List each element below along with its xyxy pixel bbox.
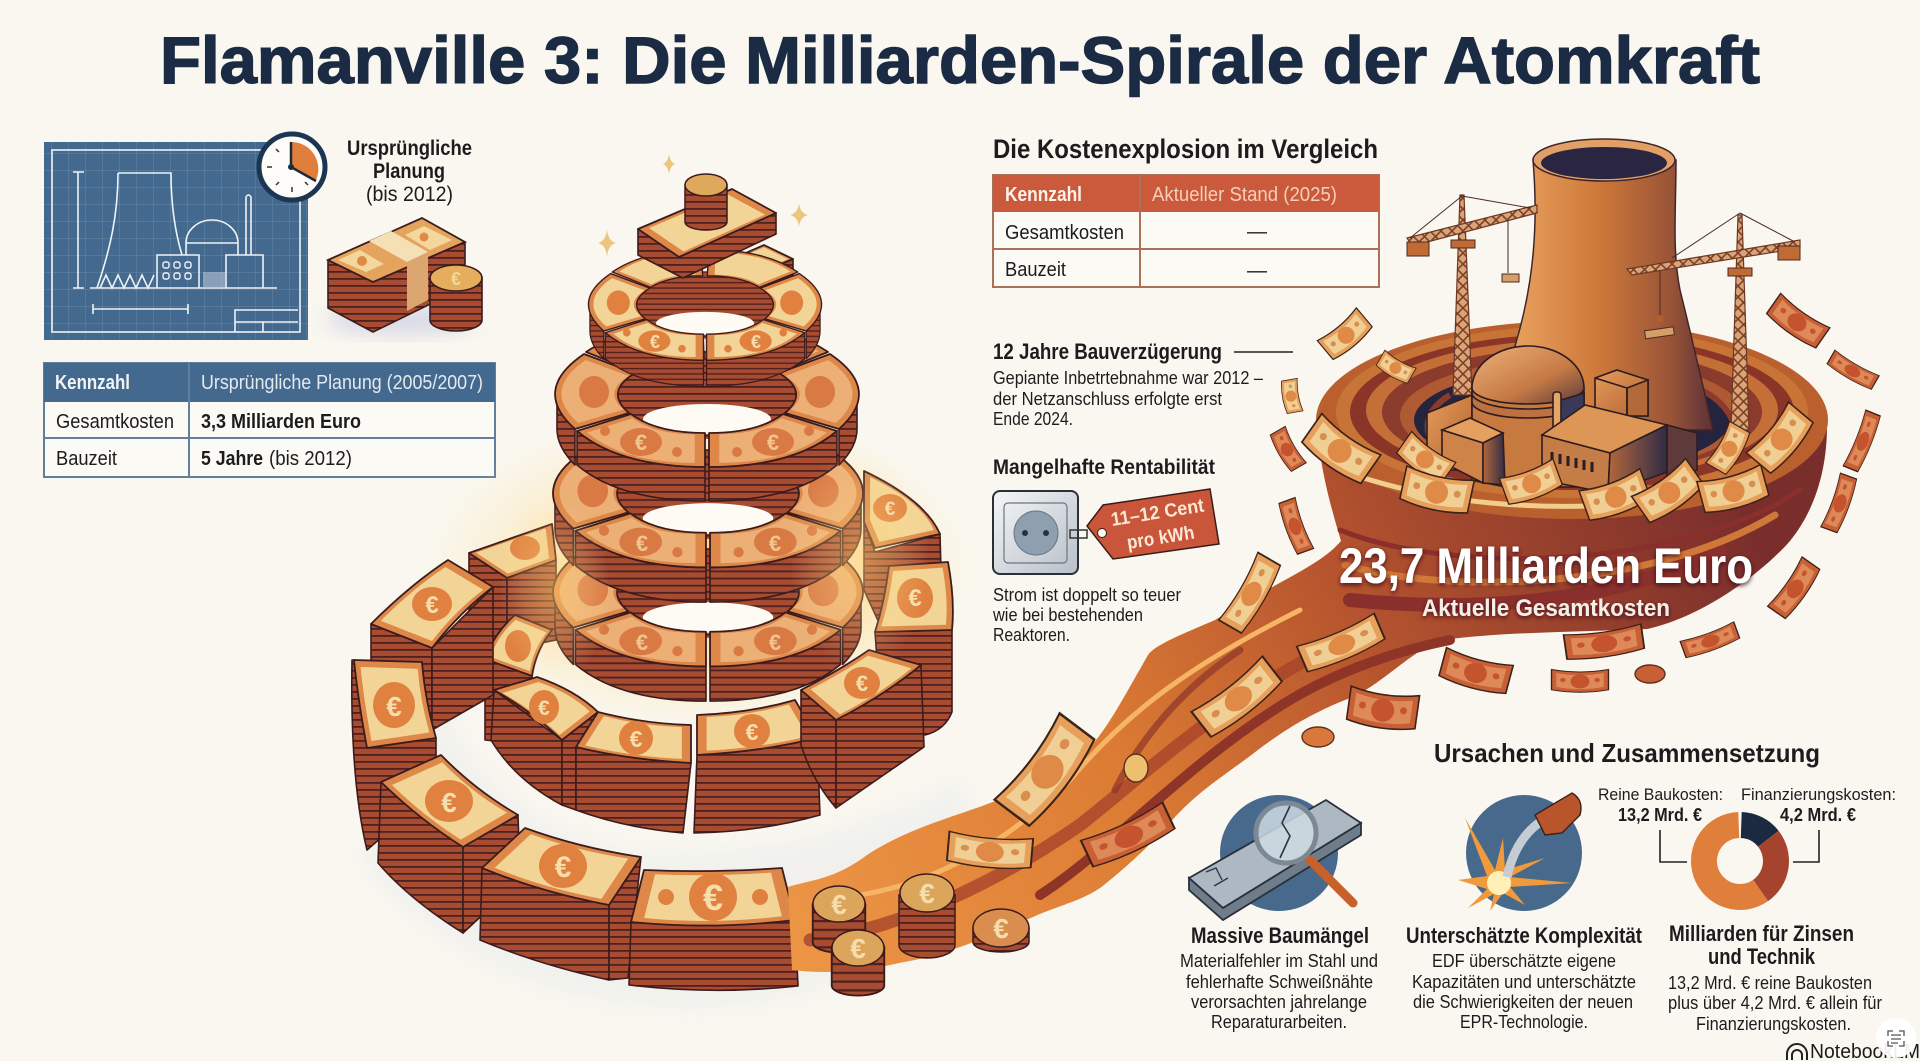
text: complexity: EDF überschätzte eigene: [1432, 951, 1616, 971]
crane right: [1627, 213, 1800, 430]
callout: profitability: Strom ist doppelt so teuer: [993, 585, 1181, 605]
coin 4: [973, 909, 1029, 952]
tower ring 4: €: [636, 630, 648, 655]
stream streaks: [810, 490, 1800, 940]
panel: original planning: [44, 134, 495, 477]
table: original planning: [44, 363, 495, 477]
text: complexity: Kapazitäten und unterschätzte: [1412, 972, 1636, 992]
coins on floor: [813, 874, 1029, 996]
floating scan button: [1876, 1018, 1916, 1058]
icon: welding torch: [1458, 793, 1582, 911]
chart labels: 4,2 Mrd. €: [1780, 805, 1856, 825]
text: construction defects: Reparaturarbeiten.: [1211, 1012, 1347, 1032]
inner lower ring: €: [908, 585, 922, 612]
inner lower ring: €: [630, 726, 643, 752]
crane left: [1407, 195, 1537, 395]
heading: causes: Ursachen und Zusammensetzung: [1434, 738, 1820, 768]
table: original planning: Ursprüngliche Planung (2005/2007): [201, 372, 483, 394]
text: financing: 13,2 Mrd. € reine Baukosten: [1668, 973, 1872, 993]
tower ring 2: €: [635, 430, 647, 455]
text: complexity: [1406, 923, 1643, 1032]
tower ring 3: [553, 421, 863, 602]
table: current state: Gesamtkosten: [1005, 222, 1124, 244]
outer front ring: €: [441, 787, 457, 818]
money stream: [788, 426, 1827, 972]
text: financing: Milliarden für Zinsen: [1669, 921, 1854, 946]
icon: socket: [993, 491, 1087, 574]
text: construction defects: Massive Baumängel: [1191, 923, 1369, 948]
title: Flamanville 3: Die Milliarden-Spirale der Atomkraft: [160, 23, 1760, 97]
text: complexity: die Schwierigkeiten der neuen: [1413, 992, 1633, 1012]
vortex rim: [1316, 321, 1828, 519]
tower ring 1: €: [650, 332, 660, 352]
reactor buildings: [1427, 346, 1697, 493]
table: current state: —: [1247, 221, 1267, 243]
chart labels: 13,2 Mrd. €: [1618, 805, 1702, 825]
panel: construction defects: [1180, 795, 1378, 1032]
tower ring 1: €: [751, 332, 761, 352]
table: current state: —: [1247, 260, 1267, 282]
coin stack 1: [813, 886, 865, 952]
tower ring 1: [588, 250, 822, 386]
table: original planning: 5 Jahre: [201, 448, 263, 470]
tower ring 3: €: [636, 531, 648, 556]
callout: profitability: wie bei bestehenden: [992, 605, 1143, 625]
callout: profitability: Reaktoren.: [993, 625, 1070, 645]
tower ring 4: [553, 520, 863, 701]
tower ring 4: €: [769, 630, 781, 655]
text: construction defects: [1180, 923, 1378, 1032]
text: complexity: EPR-Technologie.: [1460, 1012, 1588, 1032]
inner lower ring: €: [538, 697, 550, 720]
text: construction defects: fehlerhafte Schweißnähte: [1186, 972, 1373, 992]
text: financing: und Technik: [1708, 944, 1816, 969]
panel: complexity: [1406, 793, 1643, 1032]
top stack with coins: [638, 174, 776, 278]
coin 4: €: [993, 913, 1009, 944]
ground shadow: [360, 700, 1000, 1010]
key figure: Aktuelle Gesamtkosten: [1422, 595, 1670, 622]
icon: money stack: [325, 218, 482, 334]
text: complexity: Unterschätzte Komplexität: [1406, 923, 1643, 948]
outer front ring: €: [425, 592, 439, 619]
golden glow overlay: [500, 450, 930, 680]
outer front ring: €: [555, 851, 572, 884]
glow: [420, 410, 980, 730]
chart labels: Reine Baukosten:: [1598, 785, 1723, 804]
heading: original planning: [347, 137, 472, 206]
heading: original planning: Planung: [373, 160, 445, 183]
icon: magnifier on cracked beam: [1189, 795, 1361, 920]
heading: original planning: (bis 2012): [366, 183, 453, 206]
illustration: money spiral: [352, 154, 1000, 1010]
table: original planning: (bis 2012): [269, 448, 352, 470]
price tag: [1087, 489, 1219, 559]
cooling tower: [1500, 139, 1713, 430]
icon: clock: [259, 134, 325, 200]
callout: delay: der Netzanschluss erfolgte erst: [993, 389, 1222, 409]
table: current state: Bauzeit: [1005, 259, 1066, 281]
flying bills: [947, 293, 1882, 871]
text: financing: [1668, 921, 1882, 1034]
callout: delay: [993, 339, 1293, 429]
coin stack 2: [832, 930, 884, 996]
heading: cost comparison: Die Kostenexplosion im Vergleich: [993, 134, 1378, 164]
heading: original planning: Ursprüngliche: [347, 137, 472, 160]
outer front ring: [352, 560, 798, 990]
key figure: [1339, 538, 1753, 622]
table: original planning: Bauzeit: [56, 448, 117, 470]
table: current state: Kennzahl: [1005, 184, 1082, 206]
coin stack 3: [899, 874, 955, 958]
text: financing: Finanzierungskosten.: [1696, 1014, 1851, 1034]
coin stack 1: €: [831, 889, 847, 920]
tower ring 2: €: [767, 430, 779, 455]
panel: financing: [1598, 785, 1896, 1034]
icon: money stack: €: [451, 269, 461, 289]
price tag: 11–12 Cent: [1109, 495, 1206, 531]
text: construction defects: verorsachten jahrelange: [1191, 992, 1367, 1012]
outer front ring: €: [386, 691, 402, 722]
outer front ring: €: [703, 877, 723, 918]
bracket lines: [1660, 830, 1819, 862]
text: construction defects: Materialfehler im Stahl und: [1180, 951, 1378, 971]
callout: profitability: Mangelhafte Rentabilität: [993, 456, 1215, 479]
callout: delay: 12 Jahre Bauverzügerung: [993, 339, 1222, 364]
price tag: pro kWh: [1125, 523, 1196, 554]
callout: delay: Ende 2024.: [993, 409, 1073, 429]
coins in stream: [1124, 665, 1665, 782]
callout: delay: Gepiante Inbetrtebnahme war 2012 –: [993, 368, 1263, 388]
illustration: vortex and reactor: [788, 139, 1882, 972]
table: original planning: Kennzahl: [55, 372, 130, 394]
inner lower ring: [491, 562, 953, 833]
table: original planning: Gesamtkosten: [56, 411, 174, 433]
table: current state: Aktueller Stand (2025): [1152, 184, 1337, 206]
coin stack 2: €: [850, 933, 866, 964]
callout: profitability: [992, 456, 1219, 645]
text: financing: plus über 4,2 Mrd. € allein für: [1668, 993, 1882, 1013]
chart labels: Finanzierungskosten:: [1741, 785, 1896, 804]
blueprint illustration: [44, 142, 308, 340]
inner lower ring: €: [746, 719, 759, 745]
chart labels: [1598, 785, 1896, 825]
sparkles: [598, 154, 808, 257]
key figure: 23,7 Milliarden Euro: [1339, 538, 1753, 594]
donut chart: [1691, 812, 1789, 910]
tower ring 3: €: [769, 531, 781, 556]
back of outer ring: [469, 471, 942, 745]
small stack behind top ring: [732, 245, 793, 289]
table: current state: [993, 175, 1379, 287]
inner lower ring: €: [856, 671, 868, 696]
table: original planning: 3,3 Milliarden Euro: [201, 411, 361, 433]
back of outer ring: €: [885, 499, 896, 520]
coin stack 3: €: [919, 878, 935, 909]
tower ring 2: [555, 323, 859, 501]
